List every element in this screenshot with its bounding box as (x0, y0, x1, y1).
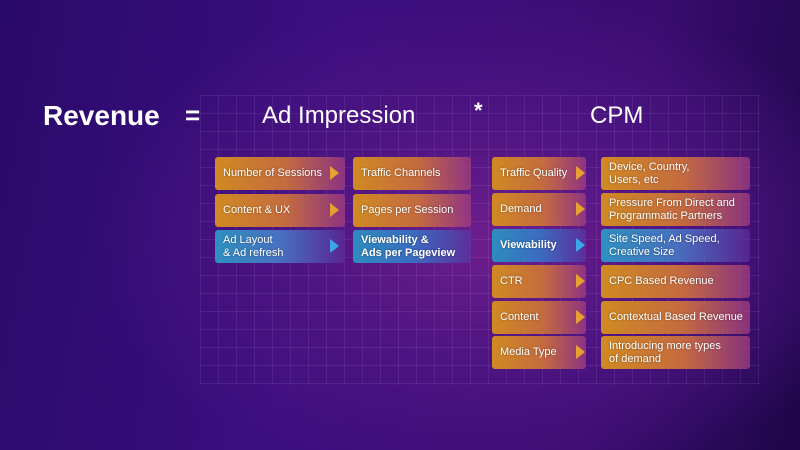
row: CTR: CTR (500, 275, 523, 287)
panel: ad impression factors: Pages per Session (361, 204, 453, 216)
row 3: & Ad refresh (223, 246, 284, 258)
row: viewability: Viewability (500, 239, 557, 251)
panel: CPM factors: CPC Based Revenue (609, 275, 714, 287)
row: media type: Media Type (500, 346, 557, 358)
row: CTR (492, 265, 586, 298)
row 3 (215, 230, 345, 263)
heading: Ad Impression: Ad Impression (262, 102, 415, 129)
row 2 (215, 194, 345, 227)
title: Revenue: Revenue (43, 100, 160, 131)
panel: CPM factors: Programmatic Partners (609, 210, 722, 222)
panel: CPM factors: Site Speed, Ad Speed, (609, 232, 720, 244)
panel: ad impression factors: Ads per Pageview (361, 246, 455, 258)
panel: CPM factors: of demand (609, 352, 661, 364)
panel: ad impression factors (215, 157, 471, 263)
row 2: Content & UX (223, 204, 290, 216)
row 3: Ad Layout (223, 234, 273, 246)
panel: CPM factors (492, 157, 750, 369)
panel: ad impression factors: Viewability & (361, 234, 429, 246)
panel: ad impression factors: Traffic Channels (361, 167, 440, 179)
panel: CPM factors: Contextual Based Revenue (609, 311, 743, 323)
panel: CPM factors: Introducing more types (609, 340, 721, 352)
row 1: Number of Sessions (223, 167, 322, 179)
row: traffic quality (492, 157, 586, 190)
panel: CPM factors: Pressure From Direct and (609, 196, 735, 208)
row: media type (492, 336, 586, 369)
row: content: Content (500, 311, 539, 323)
equals sign: = (185, 100, 200, 130)
row: demand: Demand (500, 203, 542, 215)
row: viewability (492, 229, 586, 262)
multiply sign: * (474, 98, 483, 123)
panel: CPM factors: Device, Country, (609, 160, 690, 172)
row: traffic quality: Traffic Quality (500, 167, 567, 179)
row: demand (492, 193, 586, 226)
panel: CPM factors: Users, etc (609, 174, 659, 186)
heading: CPM: CPM (590, 102, 643, 129)
row 1 (215, 157, 345, 190)
panel: CPM factors: Creative Size (609, 246, 674, 258)
row: content (492, 301, 586, 334)
